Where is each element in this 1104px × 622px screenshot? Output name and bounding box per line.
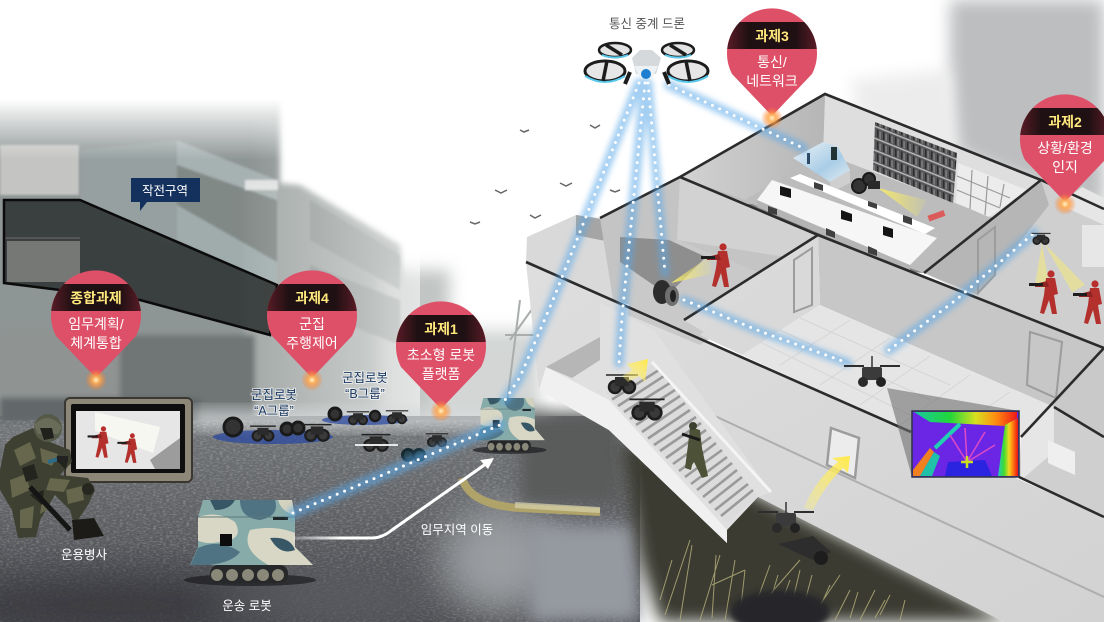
structural outlines: [526, 94, 1104, 517]
office desks: [757, 174, 937, 272]
left room: [600, 177, 818, 320]
wall drone: [1031, 233, 1051, 244]
dust and birds: [470, 125, 620, 224]
curb: [462, 478, 600, 512]
building: [526, 94, 1104, 622]
yellow arrow to door: [804, 456, 850, 510]
dark stair door: [626, 318, 637, 360]
stair soldier: [682, 422, 708, 478]
exterior front wall: [526, 262, 1104, 622]
stairs: [539, 303, 771, 543]
crane: [505, 300, 540, 420]
lidar map: [912, 411, 1019, 477]
speckled road surface: [0, 420, 640, 622]
pin: task 2: [1019, 94, 1104, 215]
tablet: [65, 398, 192, 482]
transport robot (at mission area): [473, 398, 547, 454]
white shelf: [956, 163, 1027, 217]
ground drone: [758, 502, 814, 533]
lidar map cone: [887, 388, 1019, 477]
red mat: [927, 210, 945, 222]
pin: overall task: [50, 270, 142, 391]
top fog: [0, 0, 420, 160]
corridor wall: [818, 235, 1104, 407]
label: transport robot: 운송 로봇: [222, 599, 272, 613]
pin: task 3: 네트워크: [746, 73, 798, 89]
label: swarm group A: 군집로봇: [251, 388, 297, 402]
office walls and floor: [680, 94, 1041, 273]
pin: task 2: 인지: [1052, 159, 1078, 175]
pin: task 3: 과제3: [755, 28, 789, 44]
stair robots: [606, 375, 638, 393]
pin: task 1: [395, 301, 487, 422]
label: operation zone: 작전구역: [142, 184, 188, 198]
balconies: [80, 140, 278, 285]
left room yellow beam: [671, 256, 712, 283]
right room: [924, 180, 1104, 348]
pin: task 1: 과제1: [424, 321, 458, 337]
robots in building: [606, 173, 1051, 565]
label: operation zone: [131, 178, 200, 211]
road: [0, 416, 640, 622]
red soldiers and sensing beams: [671, 188, 1102, 324]
pin: task 2: 상황/환경: [1037, 140, 1093, 156]
label: swarm group A: [251, 388, 297, 418]
pin: task 4: 과제4: [295, 290, 329, 306]
communication beams: [293, 83, 1034, 513]
pin: overall task: 체계통합: [70, 335, 122, 351]
right room yellow beams: [1035, 243, 1050, 290]
blue desk: [793, 142, 850, 192]
grass: [660, 540, 905, 620]
relay drone: [585, 43, 708, 84]
yellow arrow at stair top: [622, 359, 648, 382]
pin: overall task: 임무계획/: [68, 316, 124, 332]
lower right rooms: [1019, 407, 1104, 517]
tablet soldiers: [88, 426, 108, 458]
office drone: [852, 173, 880, 193]
tiled corridor floor: [742, 305, 1054, 437]
pin: task 1: 초소형 로봇: [407, 347, 475, 363]
office yellow beam: [878, 188, 927, 217]
operation zone highlight box: [4, 200, 277, 335]
label: swarm group A: “A그룹”: [254, 404, 294, 418]
transport robot (large): [184, 500, 316, 586]
label: swarm group B: [342, 371, 388, 401]
pin: task 1: 플랫폼: [422, 366, 460, 382]
label: relay drone: 통신 중계 드론: [609, 17, 685, 31]
ground robot: [778, 536, 831, 565]
pin: task 4: 군집: [299, 316, 325, 332]
operator soldier: [0, 414, 104, 540]
far street reflection and wet pavement: [520, 412, 620, 505]
swarm robots group B: [322, 408, 408, 425]
left upper area: [526, 215, 684, 320]
left room robot: [653, 280, 679, 306]
pin: task 2: 과제2: [1048, 114, 1082, 130]
top-right ruined tower: [950, 0, 1104, 210]
left building mass: [0, 95, 420, 425]
label: swarm group B: 군집로봇: [342, 371, 388, 385]
label: move to mission area: 임무지역 이동: [421, 523, 493, 537]
corridor drone: [844, 356, 900, 387]
pin: overall task: 종합과제: [70, 290, 122, 306]
pin: task 3: 통신/: [757, 54, 787, 70]
door on front wall: [827, 428, 859, 478]
swarm robots group A: [213, 418, 333, 444]
label: operator: 운용병사: [61, 548, 107, 562]
small robots on road: [355, 434, 448, 460]
label: swarm group B: “B그룹”: [345, 387, 385, 401]
concrete slab: [0, 145, 79, 195]
pin: task 4: [266, 270, 358, 391]
move arrow: [293, 458, 494, 538]
pin: task 3: [726, 8, 818, 129]
bookcase: [873, 122, 957, 203]
doors: [794, 227, 1062, 398]
street-side building details: [310, 200, 400, 345]
ground near wall: [620, 440, 1010, 622]
pin: task 4: 주행제어: [286, 335, 338, 351]
